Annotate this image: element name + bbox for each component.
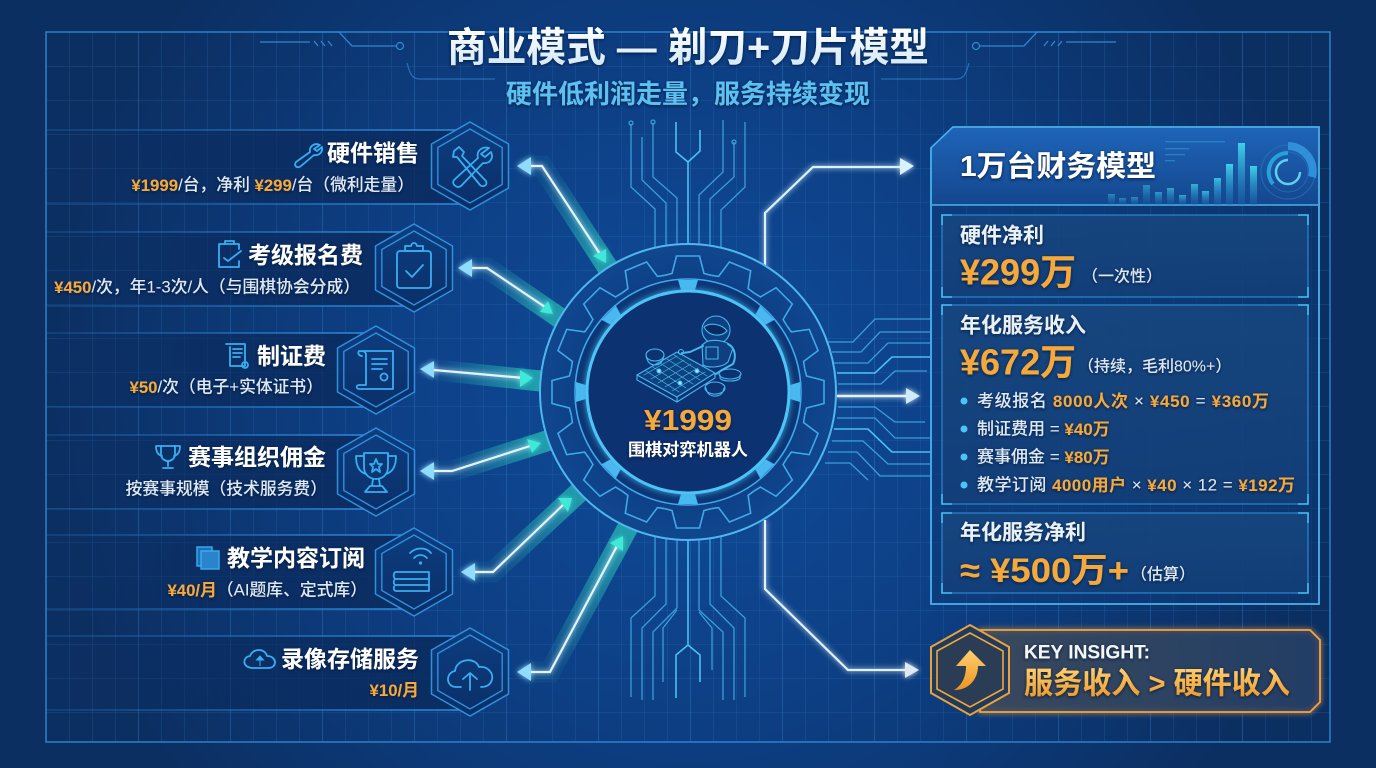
icon: orange hexagon arrow xyxy=(931,625,1009,715)
small icon: layered files xyxy=(197,547,219,569)
connector arrow: middle right xyxy=(836,388,920,404)
hexagon icon: clipboard xyxy=(376,224,452,312)
revenue breakdown list: 制证费用 = ¥40万 xyxy=(977,420,1110,438)
hexagon icon: books and wifi xyxy=(376,528,452,616)
price: ¥1999 xyxy=(644,405,732,437)
heading: 硬件销售 xyxy=(327,140,419,166)
gear outline xyxy=(552,256,824,528)
heading: 录像存储服务 xyxy=(281,646,419,672)
box: hardware net profit xyxy=(942,215,1308,297)
circuit lines: top xyxy=(629,120,745,250)
description: ¥40/月（AI题库、定式库） xyxy=(167,580,367,600)
hexagon icon: scroll xyxy=(338,326,414,414)
subtitle: 硬件低利润走量，服务持续变现 xyxy=(506,79,870,109)
row 5: content subscription xyxy=(46,528,452,616)
box: annual service net profit: （估算） xyxy=(1131,564,1195,584)
arrow: row 4 xyxy=(420,439,541,480)
hexagon icon: trophy xyxy=(338,428,414,516)
box: annual service net profit: ≈ ¥500万+ xyxy=(960,552,1129,590)
box: annual service net profit: 年化服务净利 xyxy=(960,522,1086,544)
description: ¥50/次（电子+实体证书） xyxy=(130,376,323,396)
box: annual service revenue xyxy=(942,305,1308,504)
arrow: row 2 xyxy=(458,259,553,314)
connector arrow: bottom right xyxy=(765,520,919,678)
arrow: row 6 xyxy=(517,536,623,681)
heading: 赛事组织佣金 xyxy=(188,444,326,470)
inner ring and notches xyxy=(575,279,801,505)
hexagon icon: cloud upload xyxy=(432,628,508,716)
box: annual service net profit xyxy=(942,513,1308,593)
description: ¥1999/台，净利 ¥299/台（微利走量） xyxy=(131,174,414,194)
hexagon icon: tools xyxy=(432,122,508,210)
description: ¥450/次，年1-3次/人（与围棋协会分成） xyxy=(54,278,360,296)
box: hardware net profit: 硬件净利 xyxy=(960,224,1044,248)
central gear hub xyxy=(540,244,836,540)
callout statement: 服务收入 > 硬件收入 xyxy=(1024,668,1290,700)
description: 按赛事规模（技术服务费） xyxy=(126,478,327,498)
callout: key insight xyxy=(931,625,1320,715)
row 1: hardware sales xyxy=(46,122,508,210)
panel title: 1万台财务模型 xyxy=(960,149,1156,183)
product label: 围棋对弈机器人 xyxy=(628,440,748,460)
icon: robot playing go xyxy=(637,316,741,402)
connector arrow: top right xyxy=(765,158,914,300)
box: annual service revenue: 年化服务收入 xyxy=(960,314,1086,338)
arrow: row 5 xyxy=(461,498,572,581)
box: annual service revenue: （持续，毛利80%+） xyxy=(1078,358,1231,376)
small icon: clipboard check xyxy=(219,241,241,267)
row 3: certificate fee xyxy=(46,326,414,414)
small icon: cloud xyxy=(244,650,275,668)
bright core ring xyxy=(587,291,789,493)
left arrow bands xyxy=(436,166,634,672)
header bar chart xyxy=(1108,141,1257,205)
circuit lines: bottom xyxy=(631,535,745,700)
arrow: row 3 xyxy=(420,361,533,387)
description: ¥10/月 xyxy=(370,680,419,700)
revenue breakdown list: 考级报名 8000人次 × ¥450 = ¥360万 xyxy=(977,392,1269,410)
header donut chart xyxy=(1261,145,1315,199)
revenue breakdown list: 赛事佣金 = ¥80万 xyxy=(977,446,1110,466)
revenue breakdown list: 教学订阅 4000用户 × ¥40 × 12 = ¥192万 xyxy=(977,474,1295,494)
row 4: tournament commission xyxy=(46,428,414,516)
hub outer ring xyxy=(540,244,836,540)
heading: 教学内容订阅 xyxy=(227,545,365,571)
small icon: wrench xyxy=(295,144,322,167)
box: annual service revenue: ¥672万 xyxy=(960,342,1076,382)
callout label: KEY INSIGHT: xyxy=(1024,642,1150,664)
box: hardware net profit: ¥299万 xyxy=(960,252,1076,292)
revenue breakdown list xyxy=(960,392,1295,494)
arrow: row 1 xyxy=(517,157,606,263)
small icon: certificate xyxy=(226,344,248,368)
circuit lines: right xyxy=(825,319,930,480)
title: 商业模式 — 剃刀+刀片模型 xyxy=(447,26,929,70)
header tech lines xyxy=(260,32,1116,79)
row 2: exam fee xyxy=(46,224,452,312)
panel: financial model xyxy=(931,127,1319,604)
heading: 考级报名费 xyxy=(248,242,363,268)
small icon: trophy xyxy=(156,446,180,468)
heading: 制证费 xyxy=(257,343,326,369)
row 6: video storage xyxy=(46,628,508,716)
panel header xyxy=(932,128,1318,205)
box: hardware net profit: （一次性） xyxy=(1082,268,1162,286)
